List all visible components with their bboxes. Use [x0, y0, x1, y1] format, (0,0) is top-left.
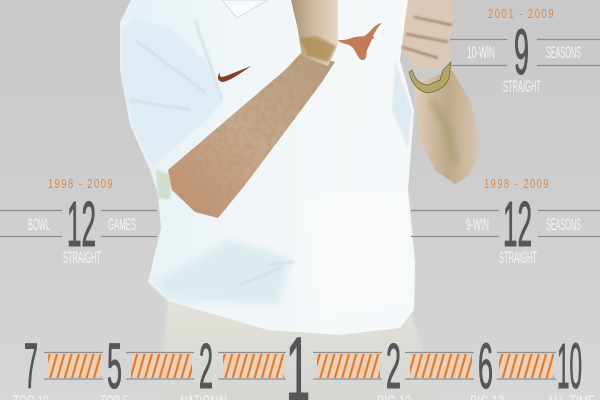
stat: 9-win seasons: 12	[503, 188, 532, 260]
icon: gold watch	[409, 62, 451, 93]
numbers: 5	[107, 330, 122, 400]
numbers: 2	[386, 330, 401, 400]
stat: 9-win seasons: STRAIGHT	[499, 248, 537, 267]
date range: 1998 - 2009	[484, 176, 550, 191]
polo shirt	[120, 0, 415, 335]
stat: 10-win seasons	[450, 6, 600, 96]
stat: bowl games: 12	[67, 188, 96, 260]
icon: longhorn logo	[338, 23, 382, 60]
stat: 10-win seasons: 10-WIN	[467, 43, 495, 62]
stat: bowl games	[0, 176, 157, 267]
date range: 2001 - 2009	[488, 6, 555, 21]
numbers: 6	[478, 330, 493, 400]
icon: nike swoosh	[218, 66, 251, 82]
stat: bowl games: STRAIGHT	[63, 248, 101, 267]
left forearm and fist	[168, 0, 338, 218]
photo: coach in white polo	[120, 0, 481, 400]
labels, cropped by the bottom edge as in the reference	[13, 392, 595, 400]
stat: 9-win seasons	[411, 176, 600, 267]
pants	[160, 298, 438, 400]
numbers	[24, 320, 582, 400]
stat: 9-win seasons: 9-WIN	[466, 215, 489, 234]
stat: bowl games: GAMES	[108, 215, 136, 234]
bottom stats row	[13, 320, 595, 400]
stat: 10-win seasons: STRAIGHT	[503, 77, 541, 96]
numbers: 2	[199, 330, 213, 400]
numbers: 7	[24, 330, 38, 400]
stat: bowl games: BOWL	[28, 215, 50, 234]
hatched bars	[44, 352, 556, 379]
date range: 1998 - 2009	[48, 176, 114, 191]
stat: 10-win seasons: 9	[514, 16, 529, 88]
right forearm and fist	[401, 0, 481, 184]
